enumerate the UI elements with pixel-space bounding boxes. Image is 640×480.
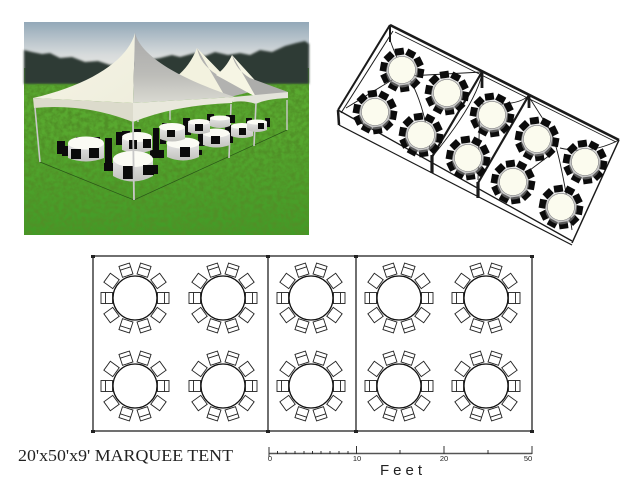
- table 7: [515, 117, 559, 161]
- scale bar: 0: [268, 454, 272, 463]
- tree line: [24, 41, 309, 84]
- main tent roof: [33, 33, 235, 122]
- table 6: [446, 136, 490, 180]
- back poles: [138, 100, 287, 130]
- photo panel: rendered tent on lawn: [24, 22, 309, 235]
- table row 2: [101, 351, 520, 421]
- scale bar: [268, 446, 532, 479]
- scale bar: 10: [353, 454, 361, 463]
- front pole over tables: [133, 122, 134, 200]
- table 2: [425, 71, 469, 115]
- table 1: [380, 48, 424, 92]
- tent outline: [91, 255, 534, 433]
- upper frame and base frame: [338, 25, 619, 245]
- table 8: [563, 140, 607, 184]
- isometric top view of tent seating: [338, 25, 619, 245]
- table 9: [491, 160, 535, 204]
- floor plan of tent with tables: [91, 255, 534, 433]
- round tables with black chairs: [57, 114, 270, 182]
- scale bar: 20: [440, 454, 448, 463]
- title: 20'x50'x9' MARQUEE TENT: [18, 446, 233, 465]
- scale bar: 50: [524, 454, 532, 463]
- table row 1: [101, 263, 520, 333]
- sky: [24, 22, 309, 68]
- ground outline of tent: [40, 130, 287, 200]
- lawn texture: [24, 84, 309, 235]
- tent poles: [35, 103, 256, 162]
- scale unit label: Feet: [380, 462, 423, 479]
- back tent modules: [176, 48, 288, 104]
- table 5: [470, 93, 514, 137]
- table 10: [539, 185, 583, 229]
- table 3: [353, 90, 397, 134]
- table 4: [399, 113, 443, 157]
